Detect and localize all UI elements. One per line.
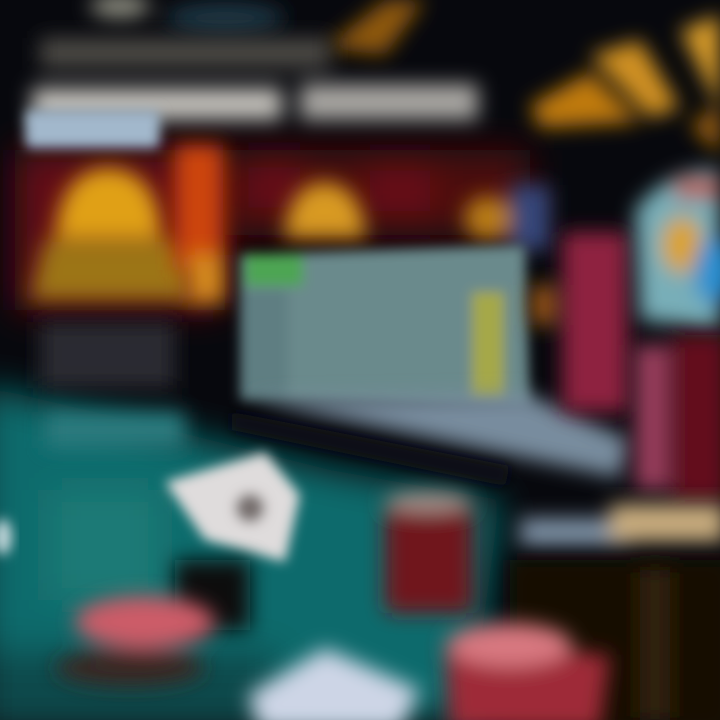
card: white lower centre xyxy=(248,648,420,720)
shelf shadow xyxy=(232,412,510,486)
left panel: gold slot dome xyxy=(30,168,190,300)
chip stack: red centre xyxy=(385,492,473,613)
edge glint xyxy=(0,519,12,555)
rainbow wheel xyxy=(635,170,720,330)
panel shelf: light steel ledge xyxy=(250,395,630,478)
chip: red and white right xyxy=(445,623,610,720)
right crimson machine xyxy=(635,335,720,500)
playing card xyxy=(165,452,300,562)
subtitle badge xyxy=(25,110,160,148)
heading: blurred title lines xyxy=(32,38,478,120)
top left icon glow xyxy=(90,0,425,55)
centre panel: grey-blue screen xyxy=(240,245,530,410)
right counter xyxy=(520,504,720,546)
orange column xyxy=(175,145,224,303)
crimson pillar xyxy=(532,232,628,412)
right small dome xyxy=(464,185,550,250)
lower right dark stools xyxy=(510,560,720,720)
background: teal table xyxy=(0,385,500,720)
background: red back wall xyxy=(15,150,530,310)
left panel: dark text block xyxy=(40,322,185,448)
chip: red and white left xyxy=(55,596,215,686)
ceiling lights: gold xyxy=(530,15,720,155)
chip stack: dark xyxy=(175,560,250,630)
centre dome xyxy=(284,182,366,238)
